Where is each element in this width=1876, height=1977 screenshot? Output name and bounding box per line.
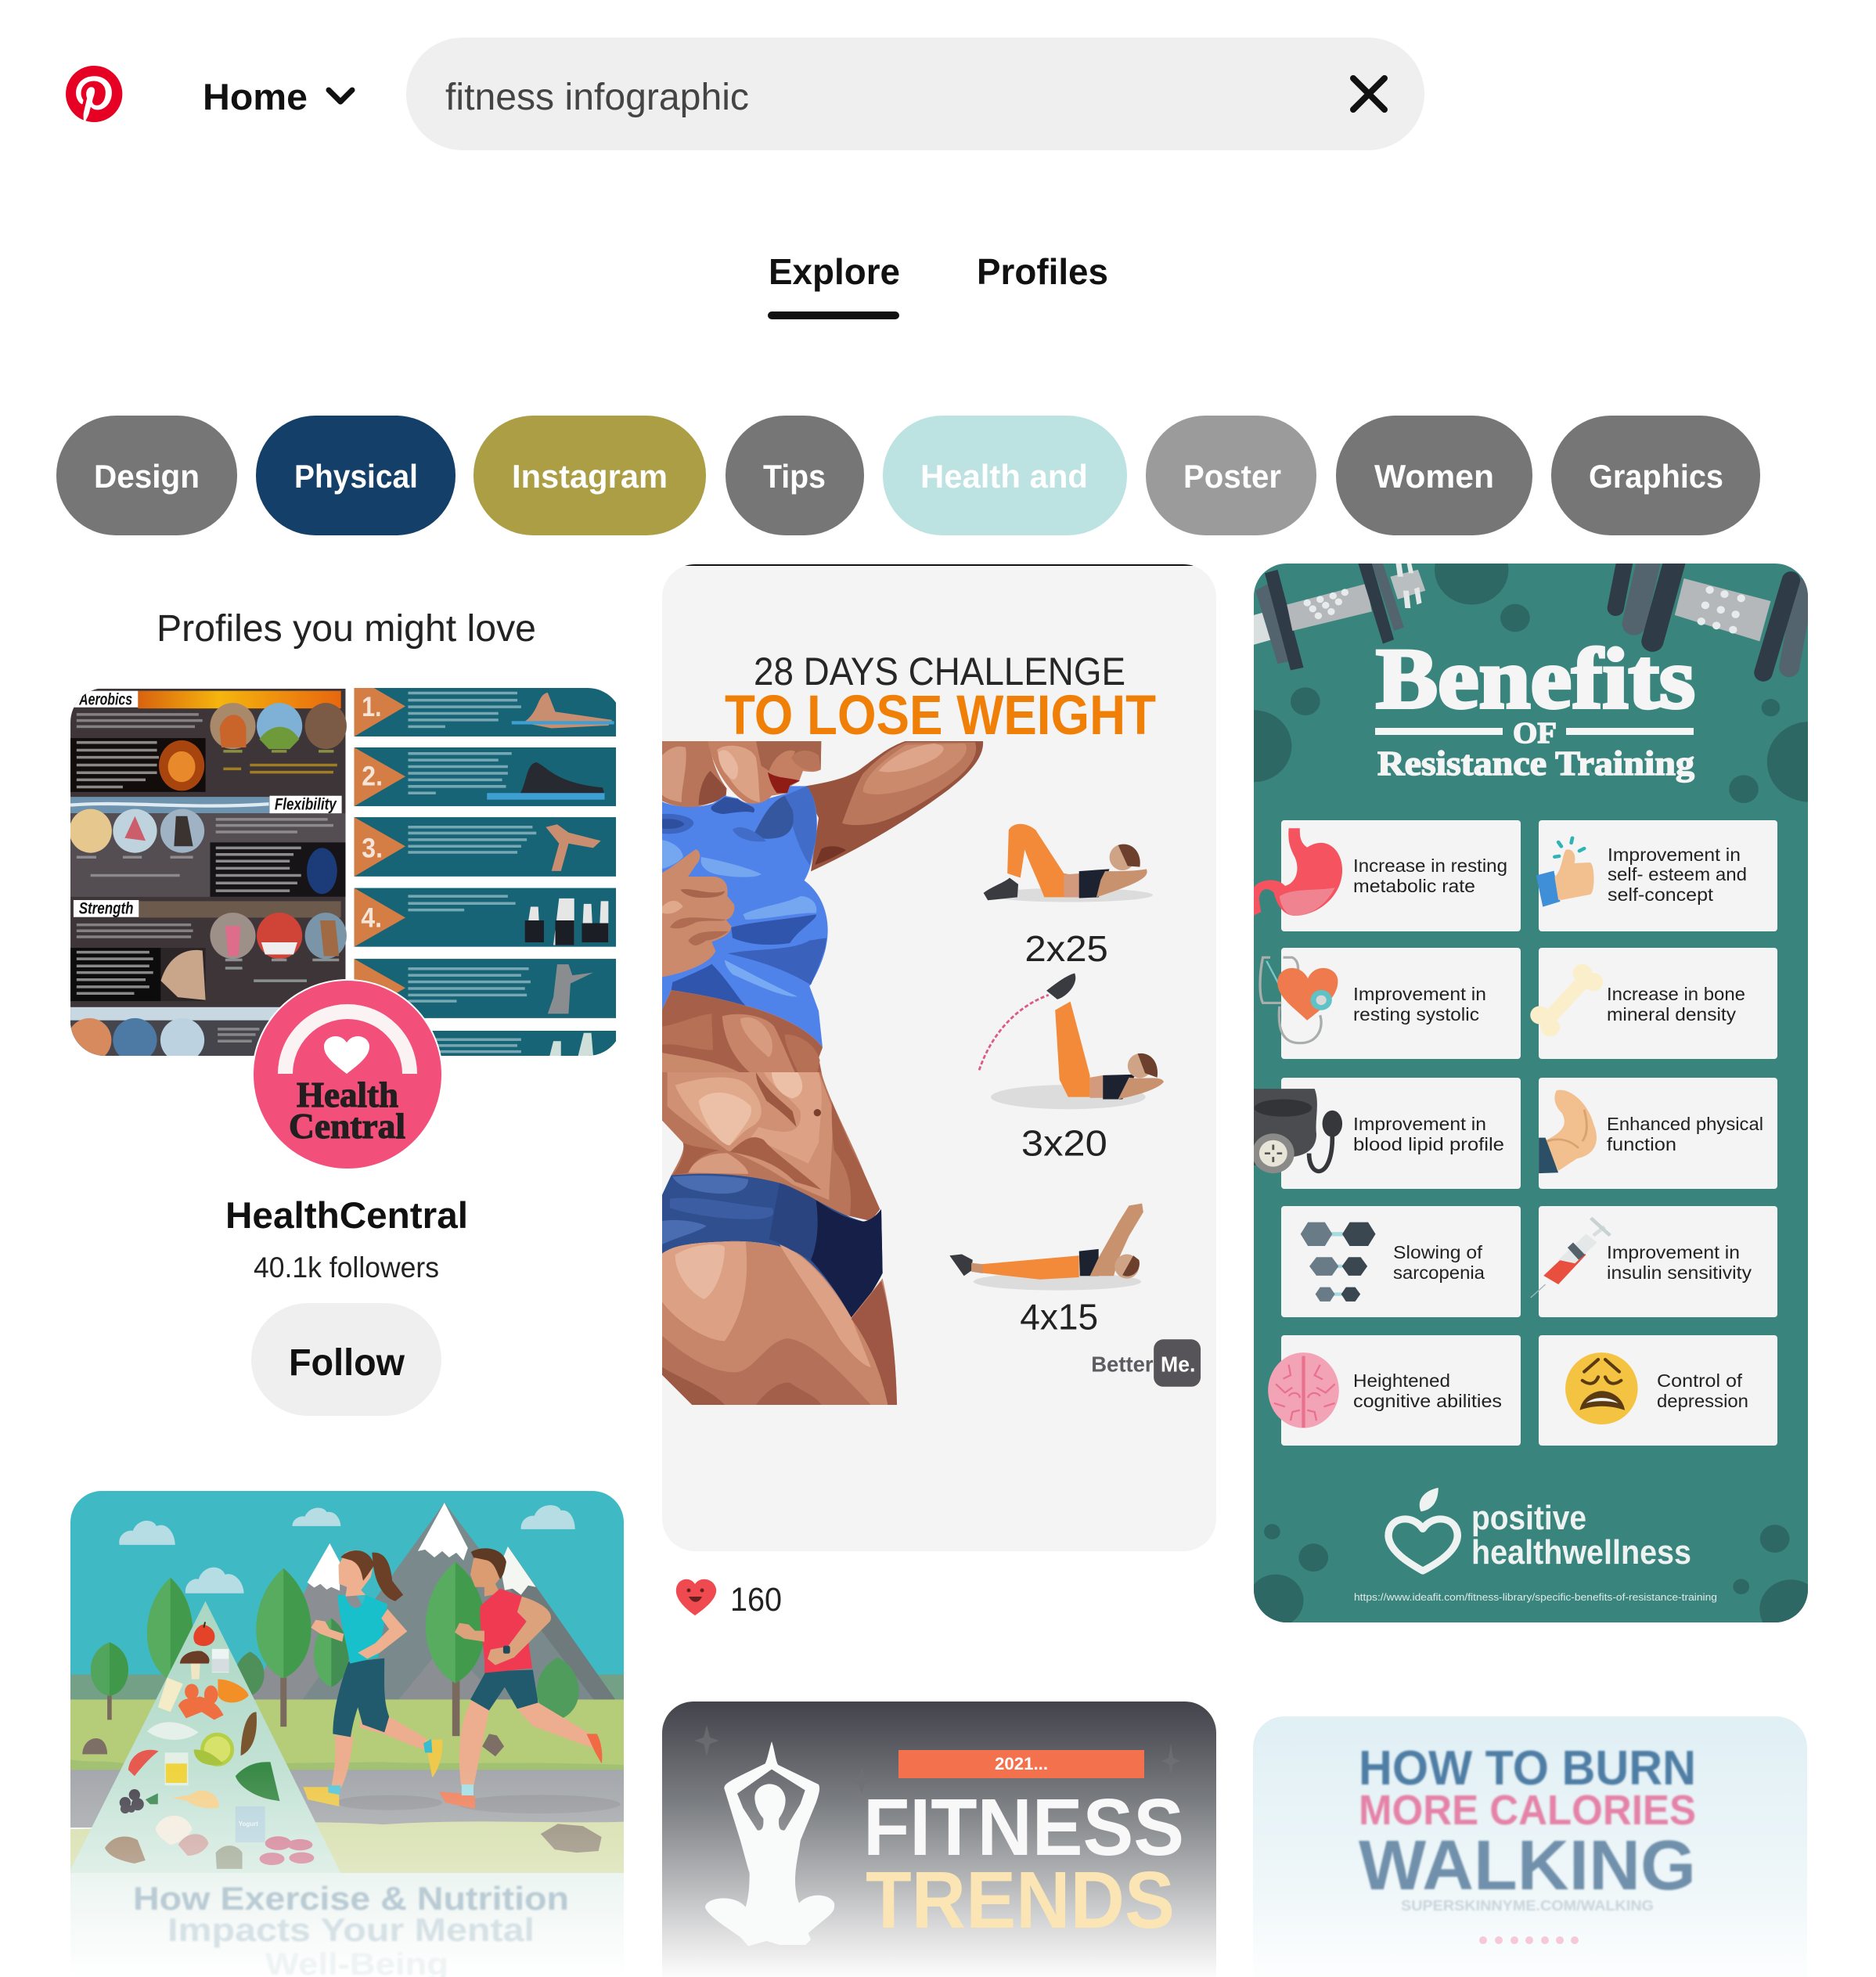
card: increase in resting metabolic rate: metabolic rate	[1353, 876, 1475, 896]
like count: 160	[730, 1581, 782, 1619]
icon: healthcentral avatar: Central	[289, 1106, 405, 1146]
icon: pinterest logo	[66, 66, 122, 122]
heading: fitness: FITNESS	[863, 1782, 1184, 1872]
heading: resistance training: Resistance Training	[1377, 744, 1694, 783]
heading: how to burn more calories walking: MORE CALORIES	[1359, 1787, 1696, 1834]
card: increase in resting metabolic rate	[1281, 820, 1521, 931]
image: numbered exercise list: 1.	[362, 693, 382, 722]
heading: of	[1375, 717, 1694, 750]
exercise 2: leg raise	[979, 974, 1164, 1109]
follower count: 40.1k followers	[254, 1251, 439, 1284]
exercise 1: crunch with bent knees	[984, 824, 1153, 902]
filter pills: Physical	[294, 458, 418, 495]
panel: how to burn more calories walking pin	[1253, 1716, 1807, 1977]
card: self-esteem: self-concept	[1608, 884, 1714, 905]
icon: weary face	[1565, 1352, 1638, 1424]
icon: stomach	[1254, 828, 1342, 916]
filter pills: Health and	[920, 458, 1088, 495]
image: numbered exercise list: 2.	[362, 762, 383, 792]
icon: brain	[1268, 1352, 1339, 1428]
card: resting systolic	[1281, 948, 1521, 1059]
card: self-esteem	[1539, 820, 1777, 931]
filter pills: Design	[94, 458, 200, 495]
background corner dots	[1248, 1524, 1823, 1639]
card: self-esteem: Improvement in	[1608, 844, 1741, 865]
faded headline: How Exercise & Nutrition	[133, 1880, 569, 1917]
heading: to lose weight: TO LOSE WEIGHT	[725, 685, 1156, 747]
card: insulin sensitivity: insulin sensitivity	[1607, 1262, 1752, 1283]
heading: trends: TRENDS	[866, 1855, 1175, 1945]
filter pills: Instagram	[512, 458, 668, 495]
card: physical function: function	[1607, 1134, 1676, 1154]
home menu	[203, 76, 352, 117]
card: depression: depression	[1657, 1391, 1748, 1411]
faded headline: Impacts Your Mental	[167, 1911, 535, 1948]
icon: syringe	[1531, 1218, 1610, 1298]
card: bone mineral density: mineral density	[1607, 1004, 1737, 1025]
profile name: HealthCentral	[225, 1194, 468, 1236]
heading: how to burn more calories walking: HOW TO BURN	[1359, 1741, 1696, 1795]
image: aerobics flexibility strength: Strength	[79, 899, 134, 917]
heading: how to burn more calories walking	[1359, 1741, 1696, 1914]
faded headline	[133, 1880, 569, 1977]
heading: of: OF	[1513, 717, 1557, 750]
card: self-esteem: self- esteem and	[1608, 864, 1747, 884]
card: sarcopenia: sarcopenia	[1393, 1262, 1485, 1283]
filter pills	[56, 416, 1760, 535]
filter pills: Tips	[763, 458, 826, 495]
illustration: woman torso	[662, 741, 983, 1405]
panel: fitness trends pin	[662, 1702, 1216, 1977]
tabs: explore and profiles: Profiles	[977, 251, 1108, 292]
source url: https://www.ideafit.com/fitness-library/specific-benefits-of-resistance-training	[1354, 1591, 1717, 1603]
card: sarcopenia	[1281, 1206, 1521, 1317]
logo: positive healthwellness: positive	[1471, 1499, 1586, 1537]
card: blood lipid profile: blood lipid profile	[1353, 1134, 1504, 1154]
card: physical function: Enhanced physical	[1607, 1114, 1763, 1134]
food pyramid: Yogurt	[239, 1820, 258, 1828]
image: aerobics flexibility strength: Flexibility	[275, 795, 337, 813]
follow button	[251, 1303, 441, 1416]
illustration: runners and food pyramid	[70, 1491, 624, 1933]
panel: benefits of resistance training	[1215, 535, 1852, 1639]
image: numbered exercise list: 3.	[362, 834, 383, 863]
heading: benefits: Benefits	[1376, 631, 1695, 726]
rep count: 3x20: 3x20	[1021, 1123, 1107, 1164]
card: increase in resting metabolic rate: Increase in resting	[1353, 855, 1507, 876]
logo: betterme: Better	[1091, 1352, 1154, 1376]
card: insulin sensitivity: Improvement in	[1607, 1242, 1740, 1262]
card: blood lipid profile: Improvement in	[1353, 1114, 1486, 1134]
icon: thumbs up	[1536, 838, 1594, 907]
rep count: 4x15: 4x15	[1020, 1297, 1098, 1338]
filter pills: Poster	[1183, 458, 1281, 495]
badge: 2021	[898, 1750, 1144, 1778]
icon: heart emoji	[676, 1579, 716, 1615]
card: physical function	[1539, 1078, 1777, 1189]
fade overlay on image	[70, 1769, 624, 1977]
image: aerobics flexibility strength: Aerobics	[78, 690, 132, 708]
panel: 28 days challenge pin	[662, 564, 1216, 1551]
illustration: exercises	[949, 824, 1201, 1387]
filter pills: Graphics	[1589, 458, 1723, 495]
card: bone mineral density	[1539, 948, 1777, 1059]
card: sarcopenia: Slowing of	[1393, 1242, 1483, 1262]
card: bone mineral density: Increase in bone	[1607, 984, 1745, 1004]
image: numbered exercise list: 4.	[361, 903, 382, 934]
image: numbered exercise list	[355, 688, 616, 1058]
icon: bone	[1530, 964, 1603, 1036]
card: cognitive abilities	[1281, 1335, 1521, 1446]
background dots and dumbbells	[1215, 535, 1852, 803]
card: resting systolic: resting systolic	[1353, 1004, 1479, 1025]
search bar: fitness infographic	[445, 77, 749, 118]
logo: betterme: Me.	[1161, 1352, 1195, 1376]
heading: profiles you might love: Profiles you might love	[157, 608, 536, 650]
decorative stars	[694, 1725, 1180, 1794]
logo: positive healthwellness: healthwellness	[1471, 1533, 1691, 1572]
card: cognitive abilities: cognitive abilities	[1353, 1391, 1502, 1411]
tabs: explore and profiles: Explore	[769, 251, 900, 292]
card: depression: Control of	[1657, 1370, 1743, 1391]
heading: 28 days challenge: 28 DAYS CHALLENGE	[754, 650, 1125, 693]
icon: dumbbells	[1301, 1223, 1376, 1302]
logo: betterme	[1091, 1339, 1201, 1387]
home menu: Home	[203, 76, 308, 117]
card: cognitive abilities: Heightened	[1353, 1370, 1450, 1391]
panel: running and nutrition pin	[67, 1487, 633, 1977]
icon: healthcentral avatar: Health	[297, 1075, 398, 1115]
icon: heart and stethoscope	[1260, 957, 1338, 1043]
card: blood lipid profile	[1281, 1078, 1521, 1189]
runner: man	[439, 1548, 602, 1809]
heading: how to burn more calories walking: WALKING	[1359, 1827, 1696, 1905]
card: insulin sensitivity	[1539, 1206, 1777, 1317]
panel: profile preview images	[67, 688, 622, 1062]
icon: yoga silhouette	[705, 1741, 834, 1946]
pagination dots	[1479, 1936, 1579, 1944]
heading: how to burn more calories walking: SUPERSKINNYME.COM/WALKING	[1401, 1898, 1654, 1914]
runner: woman	[303, 1550, 442, 1806]
card: resting systolic: Improvement in	[1353, 984, 1486, 1004]
tabs: explore and profiles	[768, 251, 1108, 319]
logo: positive healthwellness	[1388, 1488, 1691, 1572]
follow button: Follow	[289, 1342, 405, 1384]
exercise 3: arms up crunch	[949, 1204, 1143, 1291]
icon: blood pressure monitor	[1252, 1089, 1342, 1173]
rep count: 2x25: 2x25	[1024, 928, 1108, 969]
icon: healthcentral avatar	[252, 979, 443, 1170]
card: depression	[1539, 1335, 1777, 1446]
badge: 2021: 2021...	[995, 1754, 1048, 1774]
icon: flexed arm	[1539, 1090, 1597, 1173]
filter pills: Women	[1374, 458, 1494, 495]
image: aerobics flexibility strength	[67, 689, 347, 1062]
food pyramid	[70, 1601, 340, 1873]
search bar	[406, 38, 1424, 150]
